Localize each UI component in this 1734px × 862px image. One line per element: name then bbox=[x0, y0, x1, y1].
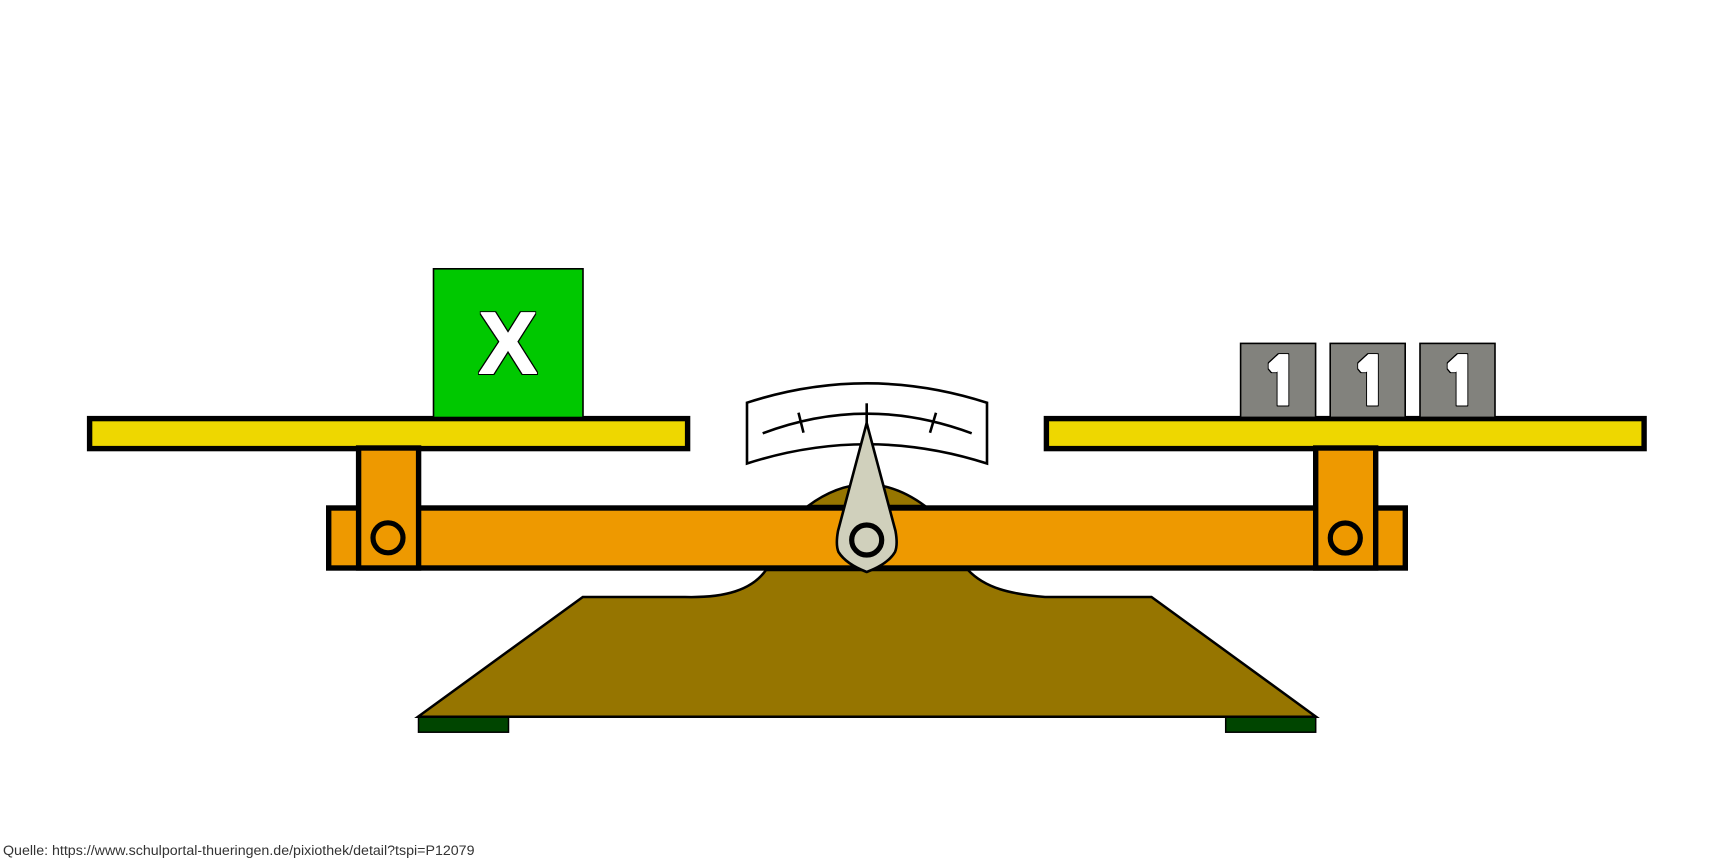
unit weight 2 bbox=[1330, 343, 1405, 417]
left pan bbox=[90, 419, 688, 449]
right post with pivot bbox=[1316, 448, 1376, 568]
pointer needle bbox=[837, 423, 897, 572]
base dome bbox=[808, 484, 925, 506]
label 1: 1 bbox=[1263, 352, 1300, 414]
right tick bbox=[930, 413, 936, 433]
right foot bbox=[1226, 717, 1316, 732]
left post with pivot bbox=[359, 448, 419, 568]
center pivot bbox=[852, 525, 882, 555]
meter dial bbox=[747, 383, 987, 464]
label 1: 1 bbox=[1352, 352, 1390, 414]
label x: X bbox=[479, 293, 537, 392]
scale base with feet bbox=[418, 484, 1316, 732]
green unknown block x bbox=[434, 269, 583, 418]
left tick bbox=[798, 413, 804, 433]
dial face bbox=[747, 383, 987, 464]
left post bbox=[359, 448, 419, 568]
grey block bbox=[1330, 343, 1405, 417]
left foot bbox=[418, 717, 508, 732]
right post bbox=[1316, 448, 1376, 568]
unit weight 3 bbox=[1420, 343, 1495, 417]
right pan bbox=[1046, 419, 1644, 449]
grey block bbox=[1420, 343, 1495, 417]
source caption: Quelle: https://www.schulportal-thueringen.de/pixiothek/detail?tspi=P12079 bbox=[3, 843, 475, 859]
balance beam bbox=[329, 508, 1405, 568]
grey block bbox=[1241, 343, 1316, 417]
unit weight 1 bbox=[1241, 343, 1316, 417]
green block bbox=[434, 269, 583, 418]
pointer with center pivot bbox=[837, 423, 897, 572]
dial scale arc bbox=[763, 414, 972, 433]
right pivot bbox=[1330, 523, 1360, 553]
label 1: 1 bbox=[1442, 352, 1479, 414]
center tick bbox=[865, 403, 868, 426]
left pivot bbox=[373, 523, 403, 553]
base body bbox=[418, 570, 1316, 717]
